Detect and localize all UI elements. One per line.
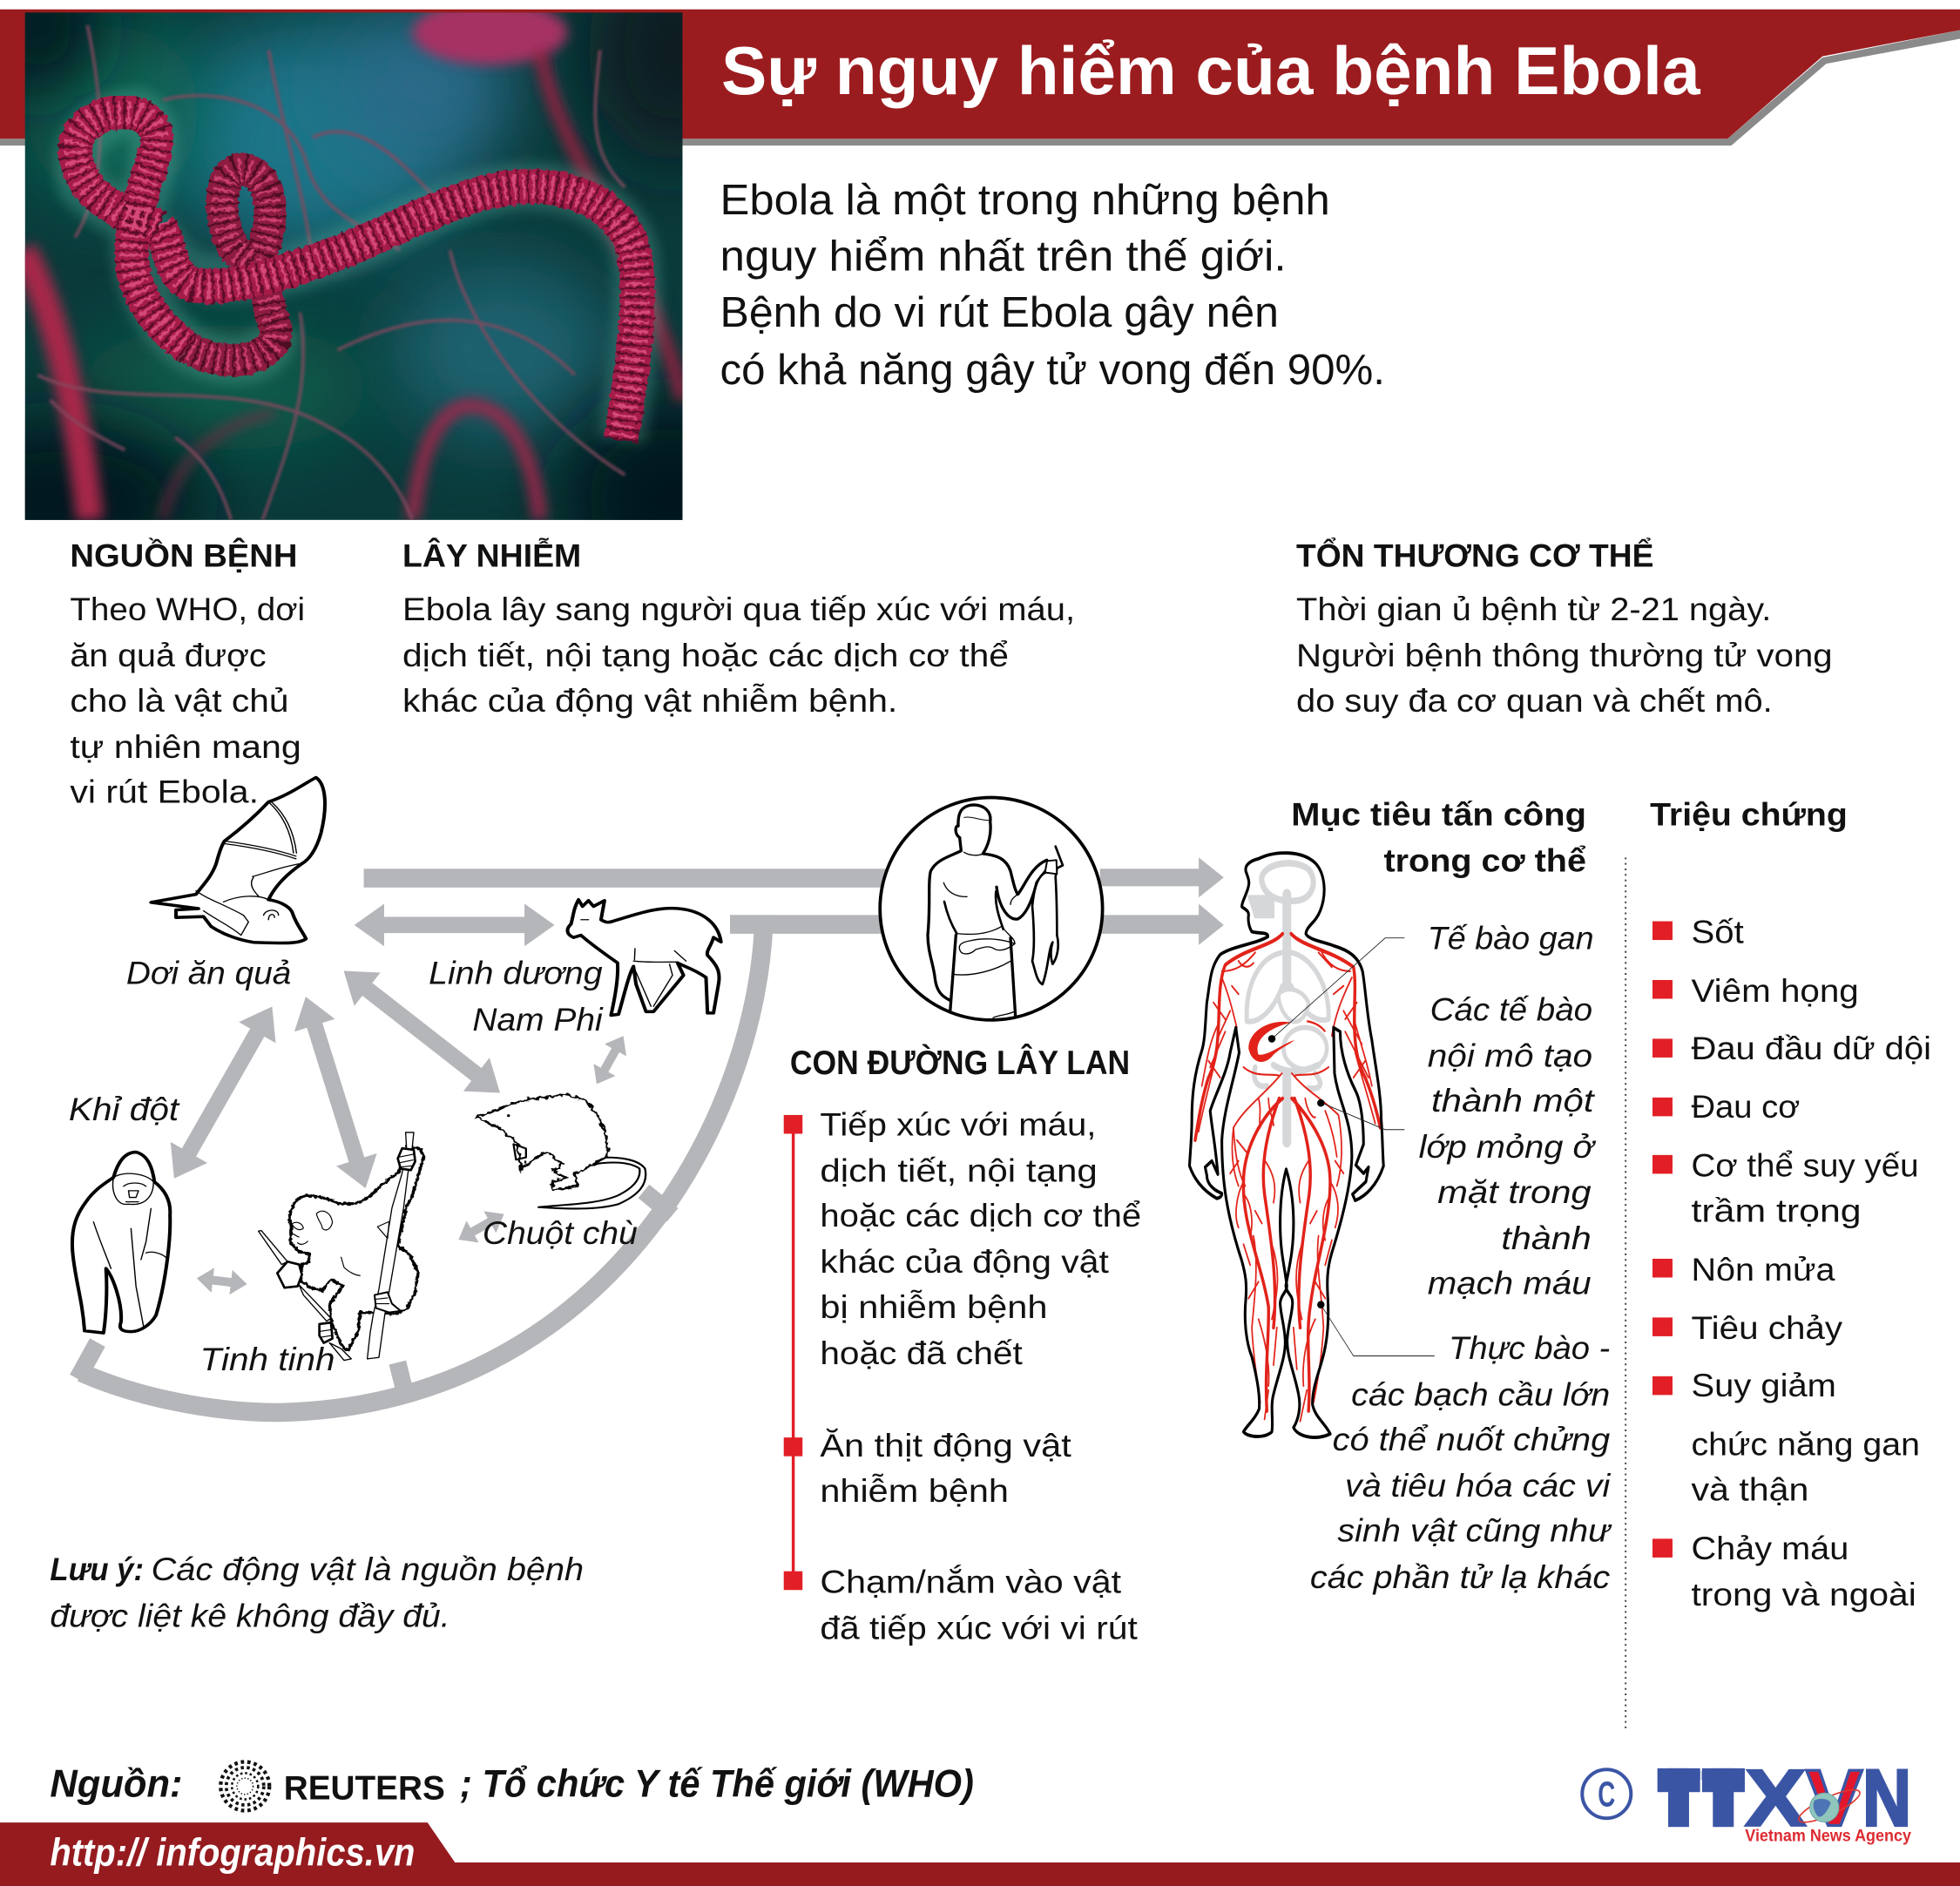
transmission routes list: Ăn thịt động vật [820, 1427, 1071, 1464]
transmission arc [78, 923, 775, 1412]
symptoms list: Viêm họng [1691, 972, 1859, 1009]
symptoms list: Sốt [1691, 913, 1744, 950]
main strand [159, 186, 638, 440]
panel: tổn thương cơ thể: Người bệnh thông thường tử vong [1296, 637, 1833, 673]
panel: nguồn bệnh: Theo WHO, dơi [70, 591, 305, 627]
animal labels: Nam Phi [472, 1001, 604, 1038]
panel: tổn thương cơ thể: do suy đa cơ quan và chết mô. [1296, 682, 1773, 719]
body diagram [1190, 853, 1435, 1437]
arrows to human and body [364, 857, 1224, 945]
panel: nguồn bệnh: ăn quả được [70, 637, 267, 673]
TTXVN logo: X [1745, 1754, 1806, 1843]
title: Sự nguy hiểm của bệnh Ebola [721, 34, 1700, 109]
panel: nguồn bệnh: cho là vật chủ [70, 682, 288, 719]
symptoms list: chức năng gan [1691, 1426, 1920, 1463]
body target labels: và tiêu hóa các vi [1345, 1467, 1612, 1504]
TTXVN logo: TT [1658, 1753, 1745, 1844]
intro text [720, 177, 1385, 394]
symptoms list: và thận [1691, 1470, 1808, 1507]
double arrows between animals [187, 925, 616, 1282]
panel: lây nhiễm: LÂY NHIỄM [402, 537, 581, 573]
heading: mục tiêu tấn công: Mục tiêu tấn công [1291, 795, 1586, 832]
body target labels: Các tế bào [1430, 990, 1592, 1027]
animal labels: Chuột chù [483, 1214, 638, 1251]
callout leaders [1272, 938, 1435, 1356]
body target labels: các bạch cầu lớn [1351, 1376, 1610, 1412]
body target labels: có thể nuốt chửng [1333, 1421, 1610, 1457]
heading: triệu chứng: Triệu chứng [1650, 795, 1848, 832]
body target labels: thành [1501, 1220, 1592, 1256]
intro text: Ebola là một trong những bệnh [720, 177, 1330, 224]
symptoms list: Cơ thể suy yếu [1691, 1147, 1919, 1184]
body target labels: lớp mỏng ở [1419, 1128, 1597, 1165]
symptoms list: Chảy máu [1691, 1530, 1848, 1566]
note: Lưu ý: [50, 1551, 144, 1587]
transmission routes list: hoặc đã chết [820, 1335, 1023, 1371]
icon: fruit bat [151, 778, 325, 943]
source line [50, 1762, 974, 1810]
transmission routes list: nhiễm bệnh [820, 1472, 1009, 1509]
small loop and lower arc [187, 170, 275, 360]
panel: lây nhiễm: dịch tiết, nội tạng hoặc các dịch cơ thể [402, 637, 1009, 673]
intro text: Bệnh do vi rút Ebola gây nên [720, 289, 1279, 336]
TTXVN logo [1582, 1753, 1911, 1846]
animal labels: Tinh tinh [200, 1341, 335, 1377]
vessels [1195, 934, 1380, 1422]
symptoms list: Tiêu chảy [1691, 1309, 1842, 1346]
TTXVN logo: C [1598, 1774, 1615, 1815]
photo: ebola virus [24, 12, 683, 520]
footer band: http:// infographics.vn [50, 1831, 415, 1874]
panel: lây nhiễm: khác của động vật nhiễm bệnh. [402, 682, 897, 719]
note [50, 1551, 584, 1633]
symptoms list: Nôn mửa [1691, 1251, 1835, 1288]
body target labels: mạch máu [1428, 1265, 1592, 1301]
upper left loop [75, 112, 187, 348]
icon: gorilla [72, 1153, 170, 1333]
symptoms list [1691, 913, 1931, 1612]
animal labels [69, 955, 638, 1377]
timeline bullets [784, 1115, 802, 1590]
heading: mục tiêu tấn công [1291, 795, 1586, 879]
panel: tổn thương cơ thể [1296, 536, 1833, 719]
TTXVN logo: Vietnam News Agency [1745, 1828, 1911, 1846]
body target labels: mặt trong [1437, 1173, 1592, 1210]
symptoms list: Đau cơ [1691, 1088, 1800, 1125]
panel: nguồn bệnh [70, 537, 305, 810]
heading: con đường lây lan: CON ĐƯỜNG LÂY LAN [790, 1044, 1130, 1082]
footer band [0, 1822, 1960, 1886]
panel: tổn thương cơ thể: Thời gian ủ bệnh từ 2-21 ngày. [1296, 591, 1771, 627]
source line: Nguồn: [50, 1762, 183, 1805]
transmission routes list: dịch tiết, nội tạng [820, 1152, 1098, 1188]
panel: nguồn bệnh: tự nhiên mang [70, 728, 301, 765]
body target labels: các phần tử lạ khác [1310, 1558, 1611, 1595]
source line: REUTERS [284, 1769, 445, 1807]
symptom bullets [1652, 922, 1673, 1558]
note: được liệt kê không đầy đủ. [50, 1597, 450, 1633]
transmission routes list: Tiếp xúc với máu, [820, 1105, 1096, 1142]
panel: nguồn bệnh: NGUỒN BỆNH [70, 537, 298, 573]
source line: ; Tổ chức Y tế Thế giới (WHO) [460, 1762, 974, 1805]
panel: lây nhiễm: Ebola lây sang người qua tiếp xúc với máu, [402, 591, 1075, 627]
transmission routes list [820, 1105, 1141, 1646]
body target labels: Thực bào - [1449, 1329, 1610, 1366]
transmission routes list: bị nhiễm bệnh [820, 1288, 1047, 1325]
icon: man holding dead animal in circle [880, 797, 1103, 1020]
transmission routes list: hoặc các dịch cơ thể [820, 1197, 1141, 1234]
animal labels: Linh dương [429, 955, 603, 991]
outline [1190, 853, 1383, 1437]
note: Các động vật là nguồn bệnh [152, 1551, 584, 1587]
body target labels: nội mô tạo [1428, 1037, 1592, 1073]
symptoms list: Suy giảm [1691, 1367, 1836, 1403]
transmission routes list: Chạm/nắm vào vật [820, 1564, 1122, 1600]
TTXVN logo: N [1862, 1754, 1911, 1843]
TTXVN logo: V [1806, 1754, 1862, 1843]
symptoms list: trong và ngoài [1691, 1576, 1916, 1612]
body target labels: Tế bào gan [1428, 920, 1594, 957]
body target labels: sinh vật cũng như [1337, 1512, 1612, 1549]
transmission routes list: khác của động vật [820, 1243, 1109, 1280]
liver [1248, 1022, 1294, 1062]
body target labels [1310, 920, 1612, 1595]
animal labels: Dơi ăn quả [126, 955, 291, 991]
panel: lây nhiễm [402, 537, 1075, 719]
intro text: nguy hiểm nhất trên thế giới. [720, 233, 1287, 280]
heading: mục tiêu tấn công: trong cơ thể [1383, 842, 1586, 879]
animal labels: Khỉ đột [69, 1091, 180, 1127]
organs [1247, 863, 1328, 1142]
panel: nguồn bệnh: vi rút Ebola. [70, 774, 259, 810]
symptoms list: Đau đầu dữ dội [1691, 1030, 1931, 1066]
icon: chimpanzee [259, 1132, 424, 1361]
panel: tổn thương cơ thể: TỔN THƯƠNG CƠ THỂ [1296, 536, 1653, 573]
transmission routes list: đã tiếp xúc với vi rút [820, 1610, 1138, 1646]
icon: african antelope [567, 900, 721, 1015]
symptoms list: trầm trọng [1691, 1192, 1862, 1228]
header banner [0, 10, 1960, 145]
body target labels: thành một [1431, 1082, 1595, 1119]
intro text: có khả năng gây tử vong đến 90%. [720, 347, 1385, 394]
icon: shrew [476, 1095, 645, 1208]
